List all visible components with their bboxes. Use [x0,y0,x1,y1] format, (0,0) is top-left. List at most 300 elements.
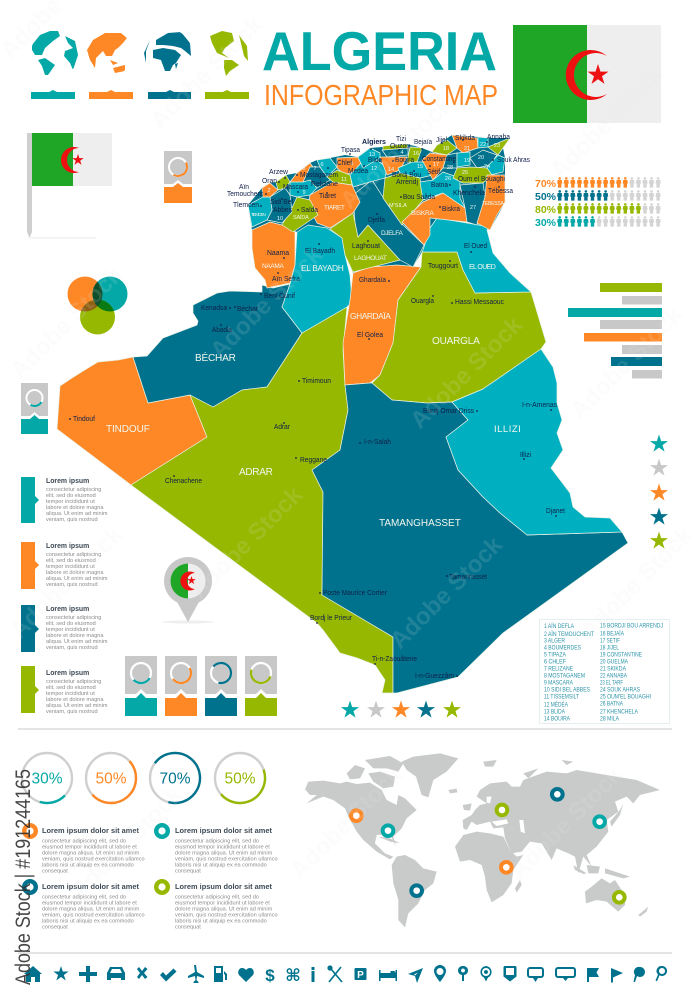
region: El Tarf [488,138,510,155]
globe: orange [87,33,127,73]
region numbers: 14 [388,167,394,173]
city labels: Jijel [436,135,447,144]
city labels: Tamanrasset [449,572,488,581]
city dots [69,139,557,677]
icon: star [53,966,69,980]
star grey [650,458,668,476]
region names: TIEMCEN [251,212,266,217]
city labels: Batna [431,180,449,189]
region names: EL OUED [469,264,496,271]
region legend: 19 CONSTANTINE [600,652,642,658]
star teal [341,700,359,718]
city labels: Médéa [348,166,369,175]
city labels: Aïn Sefra [272,274,301,283]
region legend: 7 RELIZANE [544,666,573,672]
text block dark: laboris nisi ut aliquip ex ea commodo [42,918,134,924]
list item teal: aliqua. Ut enim ad minim [46,511,108,517]
circle 50 percent: 50% [95,770,127,788]
watermark tiles: Adobe Stock [385,531,508,654]
globe: dark teal [144,32,191,71]
list item teal: Lorem ipsum [46,478,89,485]
list item green: tempor incididunt ut [46,691,95,697]
region numbers: 13 [369,152,375,158]
list item orange: aliqua. Ut enim ad minim [46,576,108,582]
region: Illizi [446,349,622,535]
region: Relizane [303,167,330,188]
region legend: 10 SIDI BEL ABBES [544,688,590,694]
list item dark: labore et dolore magna [46,633,104,639]
icon: round pin [634,967,645,982]
list item green: veniam, quis nostrud [46,709,98,715]
region: Ghardaia [343,265,421,385]
people chart [535,177,661,229]
city labels: Annaba [487,132,511,141]
city labels: Arzew [269,167,288,176]
region numbers: 15 [417,164,423,170]
list item teal: veniam, quis nostrud [46,517,98,523]
region legend: 28 MILA [600,716,619,722]
people row 80 [557,203,661,214]
venn diagram [68,276,128,334]
list item green: labore et dolore magna [46,697,104,703]
icon: fuel pump [214,966,227,982]
text block green: dolore magna aliqua. Ut enim ad minim [175,906,273,912]
watermark tiles: Adobe Stock [145,11,268,134]
list item teal: tempor incididunt ut [46,499,95,505]
percent labels: 30% [535,217,557,229]
region legend: 6 CHLEF [544,660,566,666]
watermark tiles: Adobe Stock [5,521,128,644]
region: Tissemsilt [327,170,352,185]
card orange [165,656,197,716]
text block dark: consectetur adipiscing elit, sed do [42,894,126,900]
star orange [650,484,668,501]
region numbers: 8 [302,166,306,172]
region legend: 24 SOUK AHRAS [600,688,640,694]
region: Boumerdes [382,147,408,157]
city labels: Adrar [274,422,290,431]
region: Skikda [452,135,478,153]
region: Bouira [380,157,407,175]
text block teal: dolore magna aliqua. Ut enim ad minim [175,850,273,856]
text block green: veniam, quis nostrud exercitation ullamco [175,912,278,918]
region numbers: 12 [371,166,377,172]
region legend [540,620,670,724]
icon: magnifier [656,966,667,981]
city labels: Bou Saâda [403,192,436,201]
city labels: Khenchela [453,188,486,197]
percent labels: 50% [535,191,557,203]
globe bar: dark teal [148,90,191,99]
watermark tiles: Adobe Stock [405,311,528,434]
list item orange: elit, sed do eiusmod [46,558,96,564]
text block teal [156,825,278,874]
map of Algeria [57,132,628,693]
region: Mascara [290,180,317,197]
card teal [125,656,157,716]
star green [650,532,668,549]
city labels: I-n-Amenas [522,400,557,409]
region: El Oued [422,218,531,293]
city labels: El Bayadh [305,246,335,255]
city labels: Djanet [546,506,566,515]
world map [305,753,660,927]
region: Tindouf [57,357,207,485]
region legend: 2 AÏN TEMOUCHENT [544,631,594,638]
percent labels: 80% [535,204,557,216]
icon: car [107,967,125,980]
region: Jijel [432,140,457,155]
region numbers: 21 [464,146,470,152]
text block dark: eiusmod tempor incididunt ut labore et [42,900,137,906]
list item dark [21,605,108,652]
city labels: Algiers [362,137,386,146]
star orange [392,700,410,718]
city labels: Oum el Bouaghi [458,174,505,183]
city labels: Mascara [283,182,309,191]
circle 70 percent: 70% [159,770,191,788]
list item dark: elit, sed do eiusmod [46,621,96,627]
star teal [650,434,668,452]
globe bar: teal [31,90,75,99]
icon: pennant [611,968,623,982]
region numbers: 6 [320,162,324,168]
circle 50 percent green [208,746,272,810]
star dark [417,700,435,718]
text block dark: dolore magna aliqua. Ut enim ad minim [42,906,140,912]
city labels: Tébessa [488,186,514,195]
region: Ouargla [372,252,546,403]
region: Tlemcen [248,197,272,227]
icon: dollar: $ [265,966,275,985]
icon: target pin [480,966,492,982]
region numbers: 24 [484,164,490,170]
region: Blida [358,148,380,168]
text block green: consectetur adipiscing elit, sed do [175,894,259,900]
circle 50 percent [76,743,146,813]
region: Souk Ahras [487,155,505,175]
text block dark [24,881,145,930]
watermark tiles: Adobe Stock [185,481,308,604]
city labels: Tindouf [73,414,96,423]
watermark tiles: Adobe Stock [5,261,128,384]
text block orange: consequat [42,868,68,874]
stars row [341,700,461,718]
region numbers: 18 [443,146,449,152]
region names: M'SILA [389,203,407,209]
city labels: Illizi [520,450,531,459]
city labels: Kenadsa [201,303,228,312]
icon: parking [354,968,366,981]
text block orange: veniam, quis nostrud exercitation ullamco [42,856,145,862]
text block green: consequat [175,924,201,930]
subtitle: INFOGRAPHIC MAP [264,80,498,112]
watermark tiles: Adobe Stock [505,761,628,884]
text block dark: Lorem ipsum dolor sit amet [42,882,139,891]
text block green: eiusmod tempor incididunt ut labore et [175,900,270,906]
list item dark: tempor incididunt ut [46,627,95,633]
left text list [21,477,108,715]
text block orange: dolore magna aliqua. Ut enim ad minim [42,850,140,856]
city labels: I-n-Guezzâm [415,671,454,680]
city labels: Aïn [239,182,249,191]
region legend: 3 ALGER [544,638,566,644]
region numbers: 4 [400,150,404,156]
text block orange: laboris nisi ut aliquip ex ea commodo [42,862,134,868]
city labels: Oran [262,176,277,185]
region: M'Sila [383,173,423,225]
city labels: Abadla [212,325,233,334]
star green [443,700,461,718]
region: Saida [282,197,318,232]
city labels: Béchar [237,304,258,313]
city labels: I-n-Salah [364,437,391,446]
city labels: Tipasa [341,145,361,154]
text block dark: veniam, quis nostrud exercitation ullamco [42,912,145,918]
region: Chlef [317,158,337,177]
city labels: Reggane [300,455,327,464]
city labels: Laghouat [352,241,381,250]
region numbers: 11 [341,177,347,183]
region names: EL BAYADH [301,263,344,273]
region: Tizi Ouzou band [383,144,408,150]
region: Biskra [402,193,467,245]
large flag [513,25,661,123]
watermark tiles: Adobe Stock [205,241,328,364]
icon: square marker [504,966,516,982]
region legend: 5 TIPAZA [544,652,566,658]
region numbers: 19 [464,158,470,164]
text block orange: Lorem ipsum dolor sit amet [42,826,139,835]
icon: flag [587,968,599,982]
icon: command: ⌘ [285,966,301,986]
list item teal [21,477,108,523]
region: Bordj Bou Arreridj [398,162,433,178]
percent labels [535,178,557,229]
region: Constantine [457,152,470,167]
list item green: aliqua. Ut enim ad minim [46,703,108,709]
city labels: Bordj le Prieur [310,613,352,622]
icon: speech bubble [527,967,544,982]
city labels: Mostaganem [300,170,338,179]
list item dark: Lorem ipsum [46,606,89,613]
icon: bed [379,970,397,981]
text block orange: eiusmod tempor incididunt ut labore et [42,844,137,850]
region: Ain Defla [337,157,363,175]
text block teal: consectetur adipiscing elit, sed do [175,838,259,844]
star dark [650,508,668,525]
list item dark: consectetur adipiscing [46,615,101,621]
region legend: 27 KHENCHELA [600,710,638,716]
city labels: Skikda [455,133,476,142]
people row 50 [557,190,661,201]
region legend: 4 BOUMERDES [544,646,581,652]
map pins [351,789,625,903]
city labels: Souk Ahras [497,155,530,164]
region: Khenchela [460,183,485,225]
icon: small pin [458,966,468,981]
region numbers: 20 [478,155,484,161]
icon: check [160,968,176,982]
region names [106,201,521,529]
region names: DJELFA [381,230,403,237]
list item orange: tempor incididunt ut [46,564,95,570]
region names: BISKRA [411,210,434,217]
city labels: Timimoun [302,376,331,385]
info cards row [125,656,277,716]
icon: home [24,966,42,982]
region names: BÉCHAR [195,351,236,364]
icon: fork and knife [328,966,342,982]
percent labels: 70% [535,178,557,190]
list item orange: Lorem ipsum [46,543,89,550]
list item teal: elit, sed do eiusmod [46,493,96,499]
continents [305,753,660,927]
region legend: 14 BOUIRA [544,716,570,722]
region: Mostaganem [290,163,313,182]
region: Oran [276,175,290,190]
bar chart [568,283,662,378]
globe bar: green [205,90,249,99]
region numbers: 23 [494,143,500,149]
city labels: Djelfa [368,215,386,224]
region names: OUARGLA [432,336,480,347]
region numbers: 9 [302,190,306,196]
text block dark: consequat [42,924,68,930]
city labels: Saïda [301,205,319,214]
region legend: 12 MÉDÉA [544,702,568,708]
region numbers: 17 [433,162,439,168]
list item orange: veniam, quis nostrud [46,582,98,588]
region: Tebessa [477,175,505,230]
region names: TEBESSA [482,201,504,207]
icon: cross [137,967,148,979]
region: Oum el Bouaghi [453,167,492,183]
region names: LAGHOUAT [354,255,387,262]
region: Sidi Bel Abbes [267,188,292,223]
city labels: Ti-n-Zaouâtene [372,654,417,663]
region legend: 9 MASCARA [544,680,573,686]
city labels: Constantine [422,154,456,163]
watermark tiles: Adobe Stock [335,91,458,214]
city labels: Blida [368,155,383,164]
city labels: Biskra [442,204,461,213]
globe: green [210,31,248,76]
list item dark: aliqua. Ut enim ad minim [46,639,108,645]
region numbers: 27 [470,205,476,211]
icon: pin [434,965,446,982]
city labels [73,132,566,680]
city labels: Chenachene [165,476,202,485]
text block orange: consectetur adipiscing elit, sed do [42,838,126,844]
region names: SAÏDA [293,214,309,221]
region names: GHARDAÏA [350,311,391,321]
city labels: Tlemcen [233,200,259,209]
text block teal: consequat [175,868,201,874]
text block green [156,881,278,930]
region numbers: 25 [462,170,468,176]
text block green: laboris nisi ut aliquip ex ea commodo [175,918,267,924]
region numbers: 22 [480,142,486,148]
people row 70 [557,177,661,188]
region legend: 11 TISSEMSILT [544,694,579,700]
city labels: Bordj Bou [392,170,421,179]
globe: teal [32,31,78,75]
region names: TAMANGHASSET [379,518,461,529]
region: Mila [443,153,457,168]
region: Laghouat [330,213,400,272]
circle 30 percent: 30% [31,770,63,788]
circle 30 percent [12,743,82,813]
region legend: 13 BLIDA [544,710,565,716]
vertical stock id: Adobe Stock | #191244165 [12,769,35,985]
inland seas [487,797,525,833]
city labels: El Oued [464,241,487,250]
region: Guelma [470,150,497,168]
region legend: 22 ANNABA [600,674,627,680]
list item green: consectetur adipiscing [46,679,101,685]
pole flag [27,133,112,238]
region numbers: 10 [277,216,283,222]
city labels: Relizane [311,179,338,188]
text block orange [24,825,145,874]
region: Annaba [478,137,488,148]
list item orange [21,542,108,589]
globe bar: orange [89,90,133,99]
city labels: Ghardaïa [359,275,387,284]
icon: heart [238,968,254,982]
region legend: 18 JIJEL [600,646,620,652]
list item teal: consectetur adipiscing [46,487,101,493]
region numbers: 7 [313,166,317,172]
city labels: Bejaïa [414,137,433,146]
region legend: 17 SETIF [600,638,620,644]
region: Bejaia [407,147,422,162]
left teal card [21,383,48,434]
region legend: 8 MOSTAGANEM [544,674,585,680]
city labels: Sétif [427,167,441,176]
region: Djelfa [353,180,424,267]
list item orange: labore et dolore magna [46,570,104,576]
city labels: Hassi Messaouc [455,297,504,306]
region legend: 23 EL TARF [600,680,623,686]
circle 50 percent green: 50% [224,770,256,788]
region legend: 25 OUM'EL BOUAGHI [600,694,651,700]
list item green [21,666,108,715]
region: Batna [420,172,465,208]
region legend: 16 BEJAÏA [600,630,624,638]
divider top [18,728,672,730]
region: Tamanghasset [312,383,628,693]
icon: plus [79,966,97,982]
city labels: Bouira [395,155,415,164]
city labels: Naama [267,248,290,257]
region numbers: 26 [445,176,451,182]
card green [245,656,277,716]
city labels: Chlef [337,158,353,167]
region legend: 1 AÏN DEFLA [544,623,574,630]
icon: wide speech bubble [555,967,576,981]
city labels: Poste Maurice Cortier [323,588,387,597]
text block teal: veniam, quis nostrud exercitation ullamco [175,856,278,862]
city labels: Beni Ounif [264,291,296,300]
card dark [205,656,237,716]
list item green: elit, sed do eiusmod [46,685,96,691]
northern base shape [248,135,510,273]
icon: info [312,967,314,982]
region: Naama [252,222,295,288]
circle 70 percent [140,743,210,813]
